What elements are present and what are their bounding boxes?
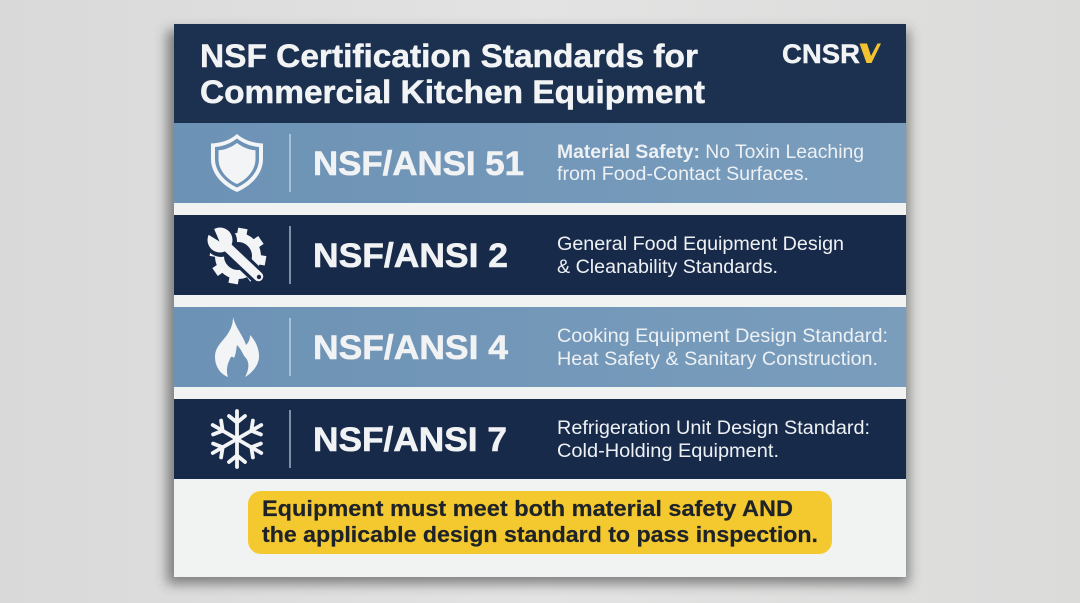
panel: certification card bbox=[174, 24, 906, 577]
standard name: NSF/ANSI 2 bbox=[313, 237, 508, 275]
icon: snowflake bbox=[209, 411, 265, 467]
icon: shield bbox=[211, 134, 263, 192]
description: Material Safety: No Toxin Leaching bbox=[557, 142, 864, 163]
description: Heat Safety & Sanitary Construction. bbox=[557, 349, 878, 370]
row: NSF/ANSI 51 bbox=[174, 123, 906, 203]
title bbox=[200, 38, 705, 110]
title: NSF Certification Standards for bbox=[200, 38, 698, 74]
description: Cold-Holding Equipment. bbox=[557, 441, 779, 462]
callout: inspection requirement bbox=[248, 491, 832, 554]
description bbox=[557, 234, 844, 278]
row: NSF/ANSI 4 bbox=[174, 307, 906, 387]
callout: inspection requirement: Equipment must meet both material safety AND bbox=[262, 496, 793, 521]
standard name: NSF/ANSI 4 bbox=[313, 329, 508, 367]
description: & Cleanability Standards. bbox=[557, 257, 778, 278]
description: Refrigeration Unit Design Standard: bbox=[557, 418, 870, 439]
description bbox=[557, 326, 888, 370]
icon: wrench and gear bbox=[204, 224, 270, 288]
icon: flame bbox=[215, 317, 259, 377]
description bbox=[557, 418, 870, 462]
description: General Food Equipment Design bbox=[557, 234, 844, 255]
title: Commercial Kitchen Equipment bbox=[200, 74, 705, 110]
description: from Food-Contact Surfaces. bbox=[557, 164, 809, 185]
callout: inspection requirement: the applicable design standard to pass inspection. bbox=[262, 522, 818, 547]
row: NSF/ANSI 2 bbox=[174, 215, 906, 295]
header band bbox=[174, 24, 906, 123]
standard name: NSF/ANSI 51 bbox=[313, 145, 524, 183]
row: NSF/ANSI 7 bbox=[174, 399, 906, 479]
description: Cooking Equipment Design Standard: bbox=[557, 326, 888, 347]
description bbox=[557, 142, 864, 185]
logo: CNSRV: CNSR bbox=[782, 39, 860, 69]
standard name: NSF/ANSI 7 bbox=[313, 421, 507, 459]
